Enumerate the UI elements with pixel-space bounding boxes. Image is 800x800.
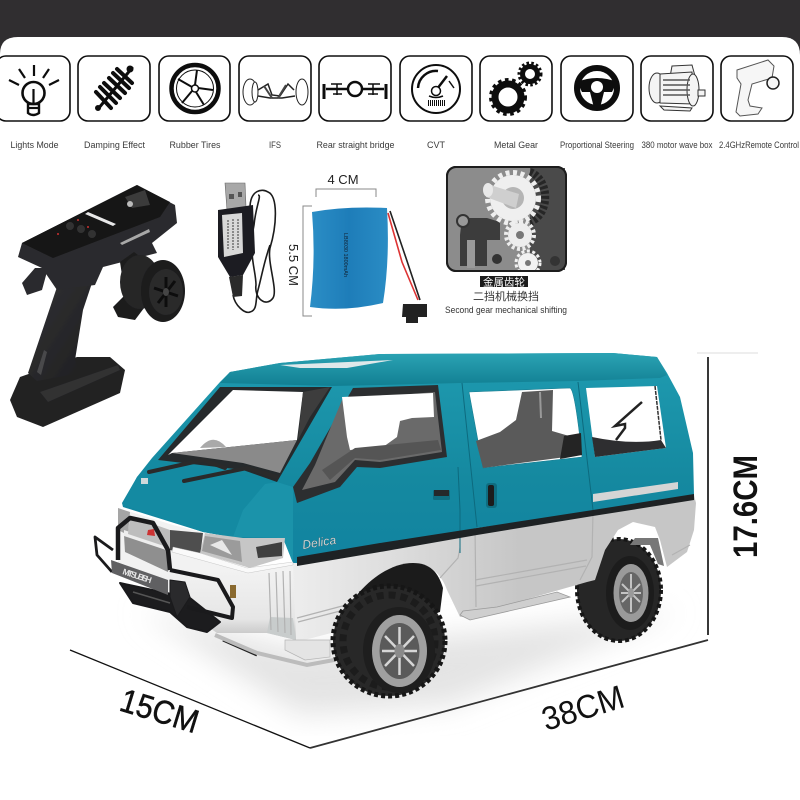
gear caption chinese: 二挡机械换挡 xyxy=(473,289,539,303)
photo: teal van xyxy=(95,353,696,696)
label: Proportional Steering: Proportional Steering xyxy=(560,140,634,150)
battery leads and connector xyxy=(388,211,427,323)
bull bar plate: MITSUBISH xyxy=(121,566,153,585)
photo: battery with dimensions: LB8030 1800mAh xyxy=(342,233,348,277)
width line xyxy=(70,650,310,748)
van side trim xyxy=(593,482,678,502)
van lower silver body xyxy=(293,495,696,643)
photo: remote transmitter xyxy=(10,185,185,427)
van marker light xyxy=(230,585,236,598)
icon: lights mode xyxy=(0,56,70,121)
van wipers xyxy=(149,460,277,481)
battery height bracket xyxy=(303,206,312,316)
battery body xyxy=(310,208,388,309)
van logo text: Delica xyxy=(301,533,337,552)
van windshield xyxy=(158,387,332,482)
van badge on hood xyxy=(141,478,148,484)
van chrome strip xyxy=(172,547,293,573)
icon: remote control xyxy=(721,56,793,121)
van front door window xyxy=(293,385,447,503)
photo: USB charger cable xyxy=(218,183,275,312)
dimension: 17.6CM: 17.6CM xyxy=(727,455,765,558)
label: Rear straight bridge: Rear straight bridge xyxy=(316,140,394,150)
icon: 380 motor xyxy=(641,56,713,121)
feature icon row xyxy=(0,56,793,121)
icon: rubber tire xyxy=(159,56,230,121)
label: CVT: CVT xyxy=(427,140,446,150)
van headlight xyxy=(200,533,285,568)
van belt stripe xyxy=(297,494,694,566)
van bull bar xyxy=(95,518,233,632)
gear caption english: Second gear mechanical shifting xyxy=(445,305,567,316)
label: IFS: IFS xyxy=(269,140,281,150)
van teal upper body xyxy=(122,353,694,563)
icon labels xyxy=(10,140,799,150)
van hood xyxy=(123,460,277,537)
van door seams xyxy=(458,382,593,553)
photo: battery with dimensions xyxy=(286,172,427,323)
van front step tube xyxy=(215,635,334,665)
icon: rear straight bridge xyxy=(319,56,391,121)
label: Metal Gear: Metal Gear xyxy=(494,140,538,150)
icon: proportional steering wheel xyxy=(561,56,633,121)
icon: metal gears xyxy=(480,56,552,121)
height line xyxy=(707,357,709,635)
icon: CVT gauge xyxy=(400,56,472,121)
label: 380 motor wave box: 380 motor wave box xyxy=(642,140,713,150)
dimension lines xyxy=(70,353,758,748)
top dark banner xyxy=(0,0,800,60)
dimension label: 5.5 CM: 5.5 CM xyxy=(286,244,301,286)
label: Rubber Tires: Rubber Tires xyxy=(170,140,221,150)
battery width bracket xyxy=(316,189,376,197)
label: Damping Effect: Damping Effect xyxy=(84,140,145,150)
van rear wheel xyxy=(577,539,661,641)
dimension: 38CM: 38CM xyxy=(537,678,628,738)
icon: independent front suspension xyxy=(239,56,311,121)
icon: damping shock xyxy=(78,56,150,121)
van front grey panels xyxy=(118,508,172,572)
length line xyxy=(310,640,708,748)
van front silver corner xyxy=(118,508,296,640)
van sliding door window xyxy=(469,388,582,468)
van rear arch suspension xyxy=(630,538,664,566)
van rear window xyxy=(586,386,666,457)
van door handles xyxy=(433,483,497,508)
van roof xyxy=(220,353,667,386)
van grille xyxy=(170,530,203,557)
van running board xyxy=(460,592,570,620)
dimension label: 4 CM: 4 CM xyxy=(327,172,359,187)
gear caption badge: 金属齿轮 xyxy=(483,276,525,288)
photo: gear close-up panel xyxy=(440,167,575,316)
dimension: 15CM: 15CM xyxy=(116,681,203,740)
van sunroof xyxy=(280,360,393,368)
label: Lights Mode: Lights Mode xyxy=(10,140,58,150)
van front wheel xyxy=(333,563,445,696)
ground shadow xyxy=(140,610,680,715)
